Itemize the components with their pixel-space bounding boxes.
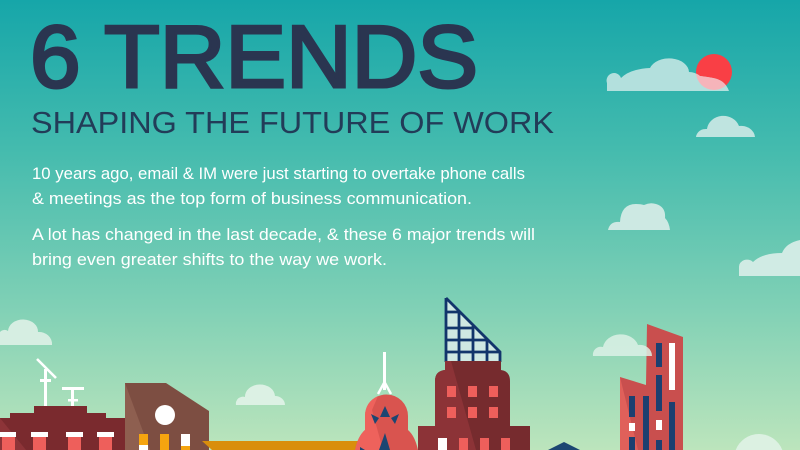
subtitle: SHAPING THE FUTURE OF WORK (31, 105, 554, 140)
orange roof (202, 441, 362, 450)
sun (696, 54, 732, 90)
intro paragraph 2: bring even greater shifts to the way we work. (32, 250, 387, 269)
building: brown with round window (125, 383, 209, 450)
antenna: tall (37, 359, 56, 406)
cloud: bottom right (736, 434, 782, 450)
intro paragraph 2: A lot has changed in the last decade, & these 6 major trends will (32, 225, 535, 244)
cloud: beside red tower (593, 334, 652, 356)
intro paragraph 1 (32, 164, 525, 208)
cloud: right edge (739, 240, 800, 276)
cloud: left edge (0, 319, 52, 345)
cloud: large near sun (607, 58, 729, 91)
building: dark red tower (418, 361, 530, 450)
intro paragraph 1: & meetings as the top form of business communication. (32, 189, 472, 208)
cloud: small upper right (696, 116, 755, 137)
navy rooftop (548, 442, 580, 450)
title: 6 TRENDS (30, 7, 478, 106)
intro paragraph 1: 10 years ago, email & IM were just starting to overtake phone calls (32, 164, 525, 183)
intro paragraph 2 (32, 225, 535, 269)
building: stepped dark red (0, 406, 125, 450)
grid tower top (446, 298, 500, 362)
cloud: middle (608, 203, 670, 230)
building: red tower with slits (620, 324, 683, 450)
antenna: short (62, 387, 84, 406)
dome building (355, 352, 418, 450)
cloud: centre low (236, 384, 285, 405)
